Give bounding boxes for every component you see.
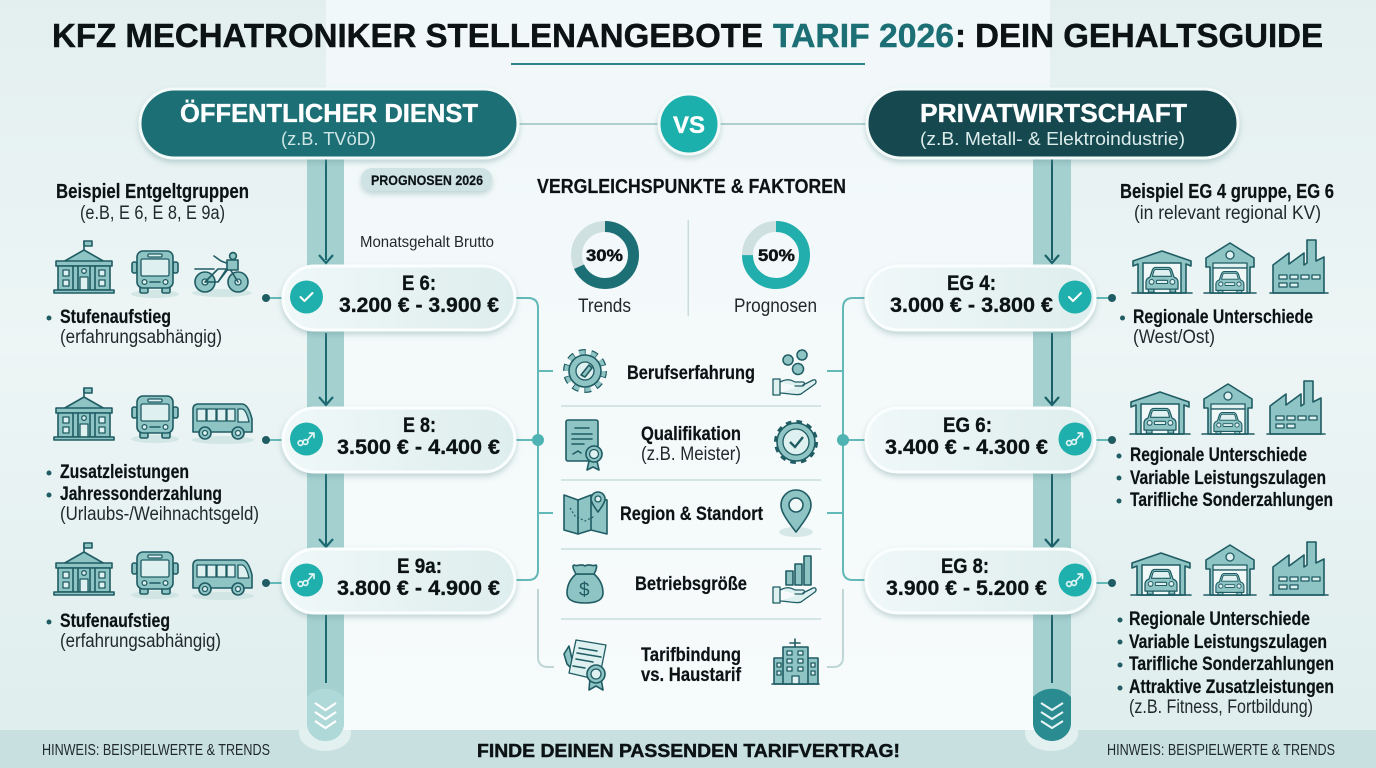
notes: right row 1: Regionale Unterschiede [1133,307,1313,328]
price pill: E 9a [283,549,515,613]
icons: right row 2 [1130,381,1325,434]
price pill: EG 6: 3.400 € - 4.300 € [885,436,1048,459]
price pill: E 6: E 6: [402,272,436,295]
factor row: betriebsgroesse [567,556,816,603]
factor row: berufserfahrung: Berufserfahrung [627,363,755,384]
notes: right row 1: (West/Ost) [1133,327,1215,348]
chevrons cap right [1033,689,1071,741]
title [52,17,1323,54]
price pill: E 8: E 8: [403,414,436,437]
notes: left row 3: (erfahrungsabhängig) [60,631,221,652]
factor row: tarifbindung [564,639,819,690]
header: oeffentlicher dienst: (z.B. TVöD) [281,129,376,149]
factor row: tarifbindung: vs. Haustarif [641,665,742,686]
connector dot left row 1 [266,297,283,299]
donut: trends [576,226,634,317]
header: privatwirtschaft: PRIVATWIRTSCHAFT [920,98,1187,128]
price pill: EG 4: EG 4: [947,272,996,295]
icon: gear [566,352,604,390]
bracket connectors left [515,298,554,667]
label: monatsgehalt brutto: Monatsgehalt Brutto [360,234,494,251]
notes: right row 2 [1116,445,1333,511]
connector dot right row 2 [1095,439,1112,441]
price pill: EG 6: EG 6: [943,414,992,437]
vs connector lines [518,123,867,125]
icon: money bag [567,565,603,603]
notes: right row 2: Tarifliche Sonderzahlungen [1130,490,1333,511]
icon: map [564,492,607,534]
panel: left intro: Beispiel Entgeltgruppen [56,181,249,203]
panel: right intro: (in relevant regional KV) [1134,203,1321,224]
price pill: EG 6 [866,408,1095,472]
notes: left row 2: (Urlaubs-/Weihnachtsgeld) [60,504,259,525]
price pill: EG 8 [866,549,1095,613]
notes: left row 2: Jahressonderzahlung [60,484,222,505]
factor row: region und standort: Region & Standort [620,504,764,525]
notes: left row 1 [46,307,222,348]
header: privatwirtschaft: (z.B. Metall- & Elektroindustrie) [920,129,1185,149]
donut: prognosen: Prognosen [734,296,817,317]
notes: left row 1: Stufenaufstieg [60,307,171,328]
panel: right intro [1120,181,1334,224]
donut: trends: Trends [578,296,631,317]
factor row: qualifikation: (z.B. Meister) [641,444,741,465]
icon: office tower [772,639,819,684]
badge: prognosen 2026: PROGNOSEN 2026 [371,172,483,188]
price pill: E 6 [283,266,515,330]
icons: left row 2 [54,388,254,444]
donut: prognosen: 50% [758,246,795,265]
timeline: left column [299,158,351,751]
header: oeffentlicher dienst: ÖFFENTLICHER DIENST [180,98,478,128]
notes: right row 3: Variable Leistungszulagen [1129,632,1327,653]
price pill: E 8 [283,408,515,472]
icon: hand with bars [773,556,816,603]
icon: location pin [779,490,813,537]
factor row: betriebsgroesse: Betriebsgröße [635,574,747,595]
price pill: EG 4: 3.000 € - 3.800 € [890,294,1053,317]
footer bar [0,730,1376,768]
bracket connectors right [827,298,866,667]
panel: left intro [56,181,249,224]
notes: right row 1 [1120,307,1313,348]
header: oeffentlicher dienst [140,89,518,158]
notes: right row 3: Tarifliche Sonderzahlungen [1129,654,1334,675]
connector dot left row 3 [266,582,283,584]
factor row: berufserfahrung [566,350,816,395]
badge: prognosen 2026 [361,168,492,191]
connector dot left row 2 [266,439,283,441]
heading: vergleichspunkte: VERGLEICHSPUNKTE & FAKTOREN [537,176,846,198]
header: privatwirtschaft [867,89,1238,158]
factor row: region und standort [564,490,813,537]
price pill: E 9a: E 9a: [397,555,442,578]
icons: right row 3 [1131,542,1328,595]
footer call to action: FINDE DEINEN PASSENDEN TARIFVERTRAG! [477,741,900,761]
notes: left row 2: Zusatzleistungen [60,462,189,483]
price pill: E 6: 3.200 € - 3.900 € [339,294,499,317]
panel: left intro: (e.B, E 6, E 8, E 9a) [80,203,225,224]
title: TARIF 2026 [773,17,954,54]
icons: left row 3 [54,543,254,600]
icon: certificate [566,420,602,470]
notes: left row 3 [46,611,221,652]
donut: prognosen [734,226,817,317]
factor row: qualifikation [566,420,816,470]
icons: right row 1 [1132,240,1328,293]
vs badge: VS [673,112,705,139]
notes: right row 3 [1118,609,1334,718]
icon: money bag: $ [579,580,590,601]
notes: left row 2 [46,462,259,525]
footer note left: HINWEIS: BEISPIELWERTE & TRENDS [42,742,270,759]
notes: left row 3: Stufenaufstieg [60,611,170,632]
icon: hand with gears [773,350,816,395]
icon: quality seal [776,422,816,462]
connector dot right row 3 [1095,582,1112,584]
icons: left row 1 [54,241,252,298]
factor row: qualifikation: Qualifikation [641,424,741,445]
title: KFZ MECHATRONIKER STELLENANGEBOTE [52,17,763,54]
notes: right row 2: Variable Leistungszulagen [1130,468,1326,489]
timeline: right column [1025,158,1078,751]
panel: right intro: Beispiel EG 4 gruppe, EG 6 [1120,181,1334,203]
title: : DEIN GEHALTSGUIDE [955,17,1323,54]
notes: right row 2: Regionale Unterschiede [1130,445,1307,466]
donut: trends: 30% [586,246,623,265]
notes: right row 3: (z.B. Fitness, Fortbildung) [1129,697,1313,718]
notes: right row 3: Regionale Unterschiede [1129,609,1310,630]
price pill: E 9a: 3.800 € - 4.900 € [337,577,500,600]
price pill: E 8: 3.500 € - 4.400 € [337,436,500,459]
notes: left row 1: (erfahrungsabhängig) [60,327,222,348]
connector dot right row 1 [1095,297,1112,299]
chevrons cap left [307,689,344,741]
vs badge [659,94,719,154]
price pill: EG 4 [866,266,1095,330]
price pill: EG 8: 3.900 € - 5.200 € [886,577,1047,600]
price pill: EG 8: EG 8: [941,555,989,578]
icon: contract with seal [564,640,606,690]
notes: right row 3: Attraktive Zusatzleistungen [1129,677,1334,698]
factor row: tarifbindung: Tarifbindung [641,645,741,666]
